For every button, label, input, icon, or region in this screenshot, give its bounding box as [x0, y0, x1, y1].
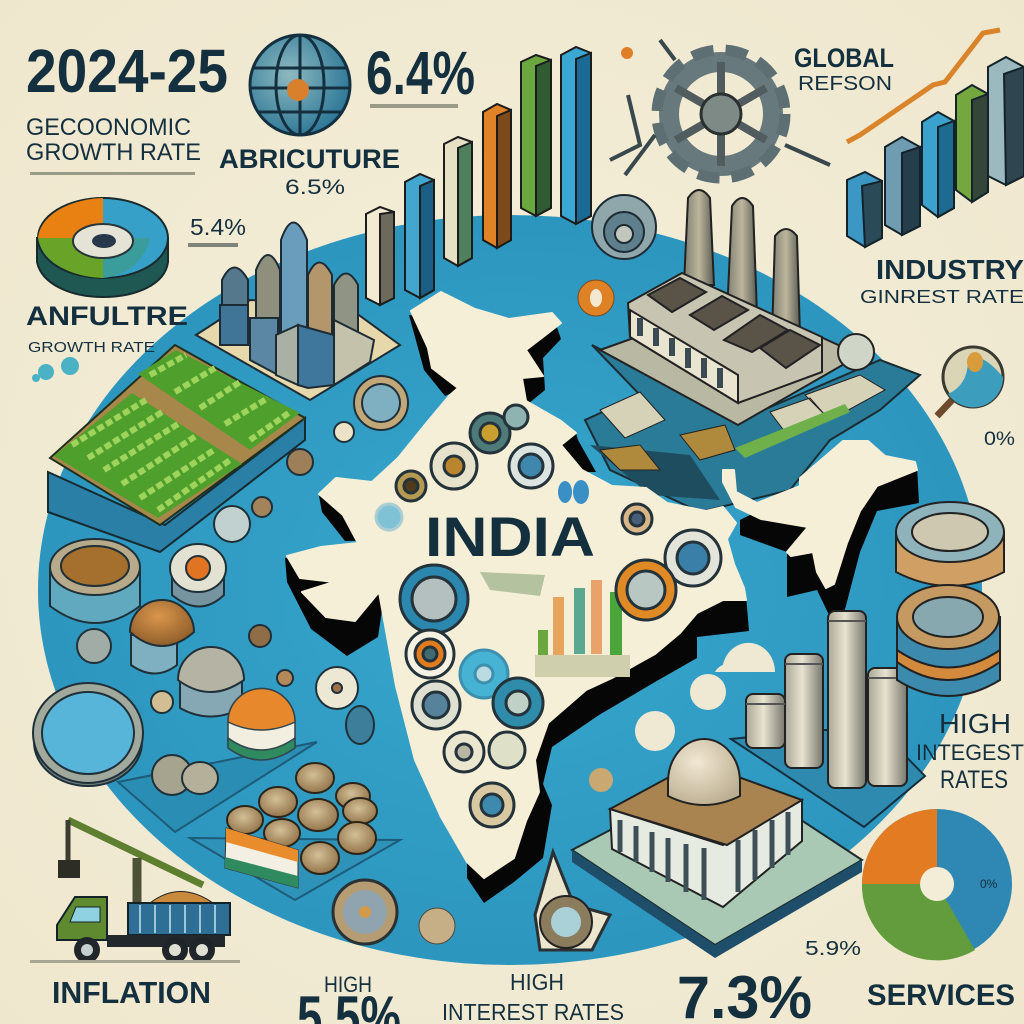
icons: medallions on map — [376, 405, 721, 827]
panel: blue circular base — [38, 215, 982, 965]
text: industry — [860, 254, 1024, 307]
icon: orange white green dome — [228, 688, 295, 760]
text: high interest rates bottom: HIGH — [510, 969, 564, 995]
chart: small bars on map — [480, 572, 630, 677]
text: manufacture heading: ANFULTRE — [26, 301, 188, 331]
text: high interest rates right — [916, 708, 1024, 794]
panel: left drums and domes — [33, 376, 408, 795]
icon: globe — [250, 35, 350, 135]
panel: factory base — [585, 300, 920, 512]
text: high interest rates right: HIGH — [939, 708, 1011, 739]
text: high interest rates right: RATES — [940, 766, 1008, 794]
text: global reform: REFSON — [798, 73, 892, 95]
chart: pie bottom right: 0% — [980, 877, 998, 891]
panel: diagonal platforms — [118, 742, 400, 900]
text: global reform: GLOBAL — [794, 43, 894, 73]
heading: 6.4 percent: 6.4% — [366, 39, 475, 107]
text: 0 percent: 0% — [984, 429, 1015, 450]
text: agriculture heading: ABRICUTURE — [219, 144, 400, 174]
text: industry: GINREST RATE — [860, 287, 1024, 307]
text: global reform — [794, 43, 894, 95]
panel: India map shadow — [285, 313, 919, 903]
text: inflation: INFLATION — [52, 975, 211, 1010]
icons: coins pile — [227, 763, 377, 874]
icon: stacked coins right — [896, 502, 1004, 696]
panel: farmland — [48, 345, 305, 552]
text: high interest rates bottom — [442, 969, 624, 1024]
chart: rising 3D bars — [366, 47, 591, 305]
icon: small coin bottom — [419, 908, 455, 944]
heading: year: 2024-25 — [26, 37, 228, 105]
panel: India map — [287, 292, 917, 878]
icon: magnifier right — [937, 347, 1003, 416]
text: manufacture heading: GROWTH RATE — [28, 339, 155, 356]
panel: factory building — [628, 273, 822, 403]
icon: truck and crane — [30, 820, 240, 963]
text: manufacture heading — [26, 301, 188, 356]
icon: swirl machine — [592, 195, 656, 259]
icon: Indian flag — [225, 828, 298, 888]
text: economic growth rate — [26, 114, 201, 166]
text: 6.5 percent: 6.5% — [285, 176, 345, 199]
icon: small teal glyphs — [32, 357, 79, 382]
panel: parliament building — [572, 739, 862, 958]
icon: large coin bottom — [333, 880, 397, 944]
text: economic growth rate: GECOONOMIC — [26, 114, 191, 141]
icon: orange pill — [578, 280, 614, 316]
chart: pie bottom right — [862, 809, 1012, 960]
text: services: SERVICES — [867, 979, 1015, 1012]
heading: India: INDIA — [425, 505, 595, 568]
text: 5.9 percent: 5.9% — [805, 938, 861, 960]
icon: small white domes — [589, 643, 775, 792]
icon: blue butterfly — [558, 480, 589, 504]
panel: right columns — [731, 611, 925, 827]
text: high interest rates right: INTEGEST — [916, 740, 1024, 765]
panel: city skyline — [196, 222, 400, 400]
text: industry: INDUSTRY — [876, 254, 1024, 285]
text: high: HIGH — [324, 972, 372, 997]
icon: gear — [610, 40, 830, 178]
icon: small gear bottom — [535, 852, 610, 950]
text: decorative caption — [30, 104, 458, 247]
text: 5.4 percent: 5.4% — [190, 214, 246, 240]
icon: pie disc left — [37, 198, 168, 297]
text: economic growth rate: GROWTH RATE — [26, 139, 201, 166]
icon: factory chimneys — [684, 190, 800, 335]
chart: top right bars and trend line — [847, 30, 1024, 247]
